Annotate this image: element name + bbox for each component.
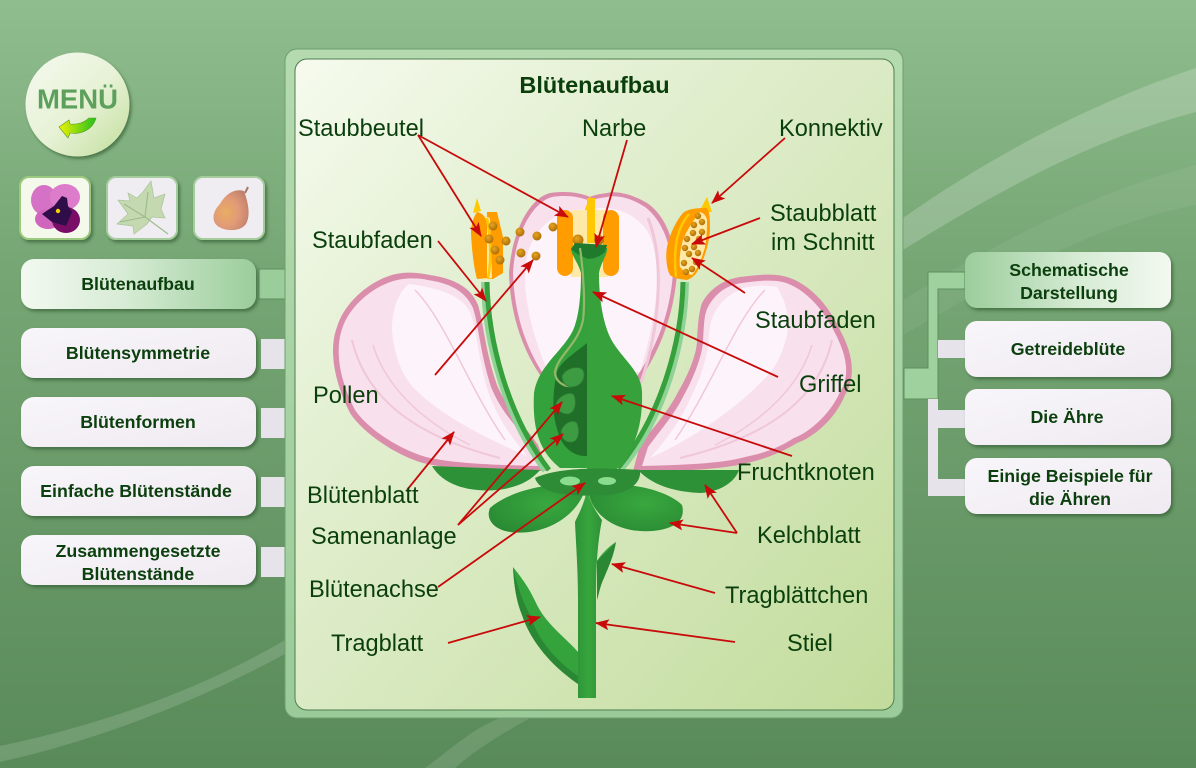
- main panel: [285, 49, 903, 718]
- right menu: [965, 252, 1171, 514]
- button: Blütenformen: Blütenformen: [80, 412, 196, 432]
- labels: Blütenblatt: [307, 483, 419, 509]
- right filament: [618, 282, 685, 468]
- pollen inside section: [681, 213, 705, 275]
- button: Schematische Darstellung: Darstellung: [1020, 283, 1118, 303]
- left anther: [471, 198, 503, 280]
- button: Einige Beispiele für die Ähren: Einige Beispiele für: [987, 466, 1153, 486]
- icon button: pear: [194, 177, 264, 239]
- labels: Staubfaden: [312, 228, 433, 254]
- connectors: right tree: [904, 272, 965, 496]
- labels: Griffel: [799, 372, 862, 398]
- labels: im Schnitt: [771, 230, 875, 256]
- right petal: [633, 275, 852, 471]
- pear: [213, 187, 249, 230]
- button: Blütensymmetrie: Blütensymmetrie: [66, 343, 210, 363]
- back sepals: [432, 466, 739, 493]
- labels: Staubbeutel: [298, 116, 424, 142]
- button: Getreideblüte: Getreideblüte: [1011, 339, 1125, 359]
- button: Blütenaufbau: [21, 259, 256, 309]
- labels: [298, 116, 883, 657]
- left menu: [21, 259, 256, 585]
- left petal: [333, 273, 548, 471]
- labels: Tragblatt: [331, 631, 424, 657]
- free pollen grains: [484, 222, 604, 264]
- button: Schematische Darstellung: Schematische: [1009, 260, 1129, 280]
- ovules: [556, 368, 584, 442]
- title: Blütenaufbau: [519, 72, 670, 98]
- middle anther: [557, 196, 619, 277]
- menu label: MENÜ: [37, 84, 118, 114]
- labels: Samenanlage: [311, 524, 457, 550]
- flower diagram: [333, 192, 852, 698]
- arrows: [407, 135, 792, 643]
- labels: Narbe: [582, 116, 646, 142]
- labels: Tragblättchen: [725, 583, 868, 609]
- button: Zusammengesetzte Blütenstände: [21, 535, 256, 585]
- back petal: [509, 192, 677, 385]
- button: Zusammengesetzte Blütenstände: Blütenstände: [82, 564, 194, 584]
- labels: Staubblatt: [770, 201, 877, 227]
- button: Blütenaufbau: Blütenaufbau: [81, 274, 195, 294]
- stem: [575, 490, 602, 698]
- button: Einige Beispiele für die Ähren: die Ähren: [1029, 489, 1111, 509]
- labels: Stiel: [787, 631, 833, 657]
- left filament: [485, 282, 549, 470]
- button: Einfache Blütenstände: Einfache Blütenstände: [40, 481, 232, 501]
- right anther cross-section: [666, 197, 712, 280]
- pistil and ovary: [534, 243, 642, 476]
- style channel: [555, 248, 584, 386]
- icon button: pansy flower: [20, 177, 90, 239]
- labels: Staubfaden: [755, 308, 876, 334]
- connectors: inactive left: [261, 339, 286, 577]
- ovary cut-away: [553, 343, 587, 456]
- connector: active left: [259, 269, 286, 299]
- front sepals: [489, 468, 683, 533]
- small bract: [597, 542, 616, 600]
- button: Blütensymmetrie: [21, 328, 256, 378]
- labels: Konnektiv: [779, 116, 883, 142]
- labels: Blütenachse: [309, 577, 439, 603]
- icon: return arrow: [59, 118, 96, 138]
- button: Die Ähre: [965, 389, 1171, 445]
- button: Die Ähre: Die Ähre: [1030, 407, 1104, 427]
- button: Blütenformen: [21, 397, 256, 447]
- maple leaf: [117, 181, 168, 234]
- calyx centre: [535, 468, 640, 496]
- bract: [513, 567, 578, 684]
- icon button: maple leaf: [107, 177, 177, 239]
- labels: Pollen: [313, 383, 379, 409]
- button: Einige Beispiele für die Ähren: [965, 458, 1171, 514]
- button: Schematische Darstellung: [965, 252, 1171, 308]
- menu button: [26, 52, 130, 156]
- button: Getreideblüte: [965, 321, 1171, 377]
- button: Einfache Blütenstände: [21, 466, 256, 516]
- button: Zusammengesetzte Blütenstände: Zusammengesetzte: [55, 541, 221, 561]
- pansy petals: [31, 184, 80, 233]
- labels: Fruchtknoten: [737, 460, 875, 486]
- labels: Kelchblatt: [757, 523, 861, 549]
